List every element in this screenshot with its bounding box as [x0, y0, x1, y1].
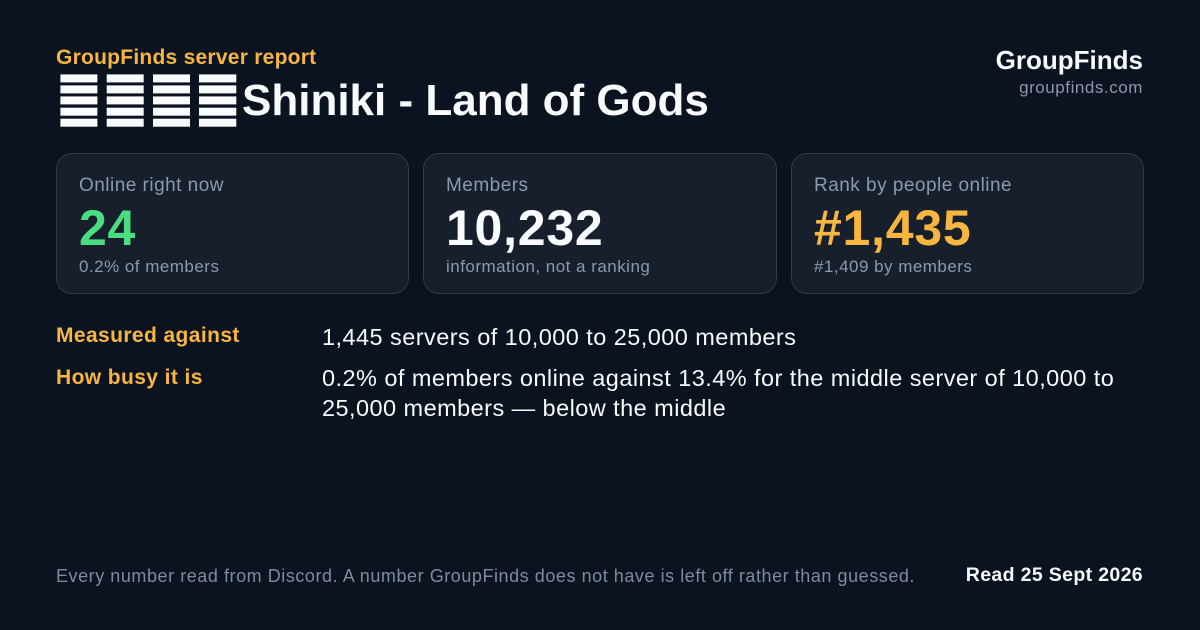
- text: how busy: 25,000 members — below the middle: [322, 395, 726, 421]
- text: how busy: [322, 365, 1114, 421]
- brand name: GroupFinds: [996, 45, 1143, 75]
- heading: measured against: Measured against: [56, 324, 240, 347]
- brand url: groupfinds.com: [1019, 78, 1143, 97]
- panel: rank: [791, 153, 1144, 294]
- label: members: Members: [446, 175, 529, 196]
- text: measured against: 1,445 servers of 10,000 to 25,000 members: [322, 324, 796, 350]
- text: how busy: 0.2% of members online against 13.4% for the middle server of 10,000 to: [322, 365, 1114, 391]
- note: share of members: 0.2% of members: [79, 257, 219, 276]
- label: online: Online right now: [79, 175, 224, 196]
- title: Shiniki - Land of Gods: [242, 76, 709, 125]
- stat: member count: 10,232: [446, 200, 603, 256]
- heading: how busy: How busy it is: [56, 366, 203, 389]
- panel: members: [423, 153, 777, 294]
- footer note: Every number read from Discord. A number GroupFinds does not have is left off rather than guessed.: [56, 566, 915, 586]
- stat: rank: #1,435: [814, 200, 971, 256]
- panel: online right now: [56, 153, 409, 294]
- footer date: Read 25 Sept 2026: [966, 564, 1143, 586]
- label: rank: Rank by people online: [814, 175, 1012, 196]
- stat: online count: 24: [79, 200, 136, 256]
- eyebrow heading: GroupFinds server report: [56, 46, 316, 69]
- note: not a ranking: information, not a ranking: [446, 257, 650, 276]
- note: rank by members: #1,409 by members: [814, 257, 972, 276]
- icon: server name block glyphs: [60, 74, 236, 127]
